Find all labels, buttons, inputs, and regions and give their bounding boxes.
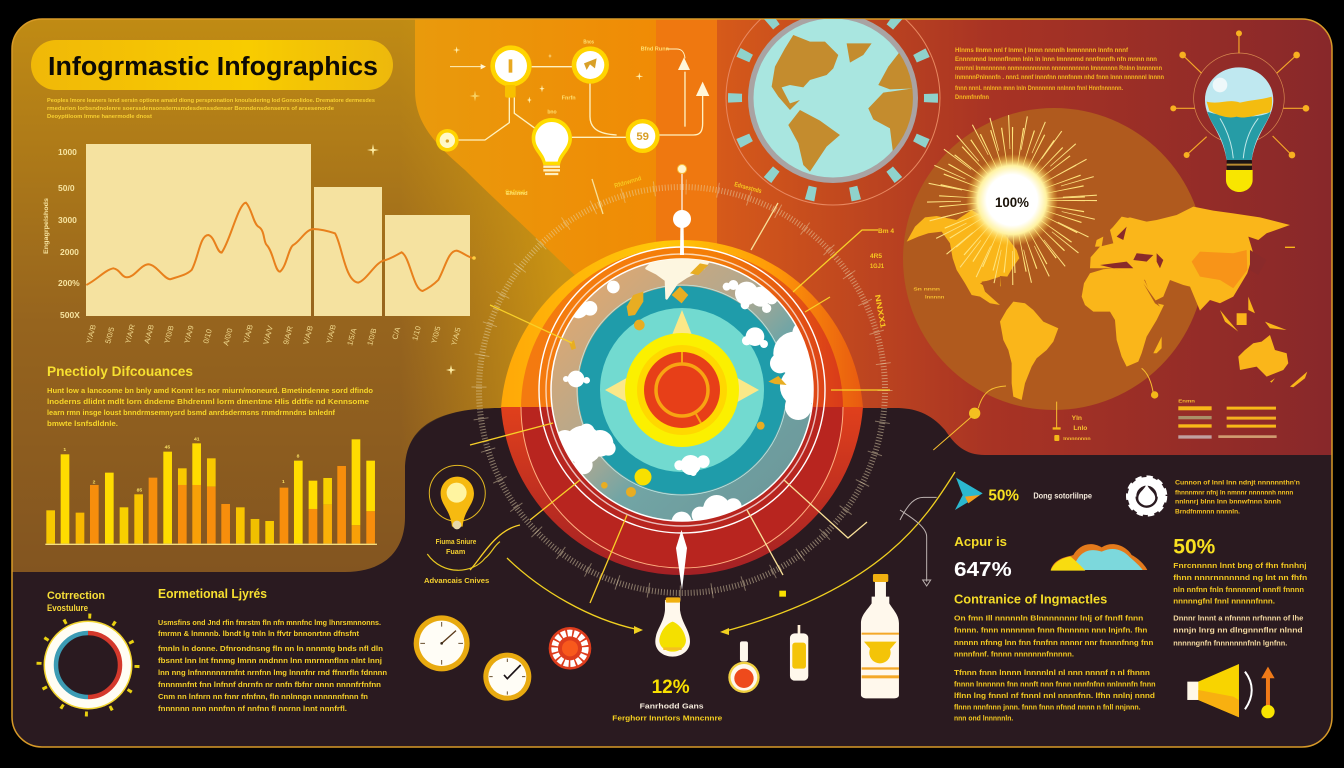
bulb collar: [1227, 160, 1252, 170]
x axis labels: A/0/0: [221, 327, 234, 347]
label arc: [427, 542, 500, 570]
donut blue arc: [56, 633, 88, 697]
small ring labels: 4R5: [870, 253, 882, 260]
bulb base: [453, 521, 461, 529]
core tick: [682, 352, 701, 423]
body text: fnnnmnfnt fnn lnfnnf dnrnfn nr nnfn fbfnr nnnn nnnnfrfnfnn: [158, 680, 381, 689]
body text: [158, 618, 387, 713]
x axis labels: C/A: [390, 326, 402, 341]
small ring labels: Ssfrnd: [505, 189, 525, 196]
bars: [46, 494, 274, 544]
clouds: [558, 259, 812, 520]
connector lines: [450, 49, 703, 140]
donut tick marks: [39, 616, 137, 714]
yellow core: [625, 333, 739, 447]
sun: 100%: [995, 194, 1030, 210]
bulb glass: [1205, 67, 1273, 160]
outer ring bottom: [501, 407, 863, 575]
inland seas: [1100, 227, 1267, 275]
map legend: [1178, 398, 1277, 439]
y axis title: Engagrpelshods: [43, 198, 50, 254]
intro text: Deoyptiloom lrmne hanermodle dnost: [47, 114, 152, 120]
body text: bmwte lsnfsdldnle.: [47, 419, 118, 428]
outer ring top: [501, 240, 863, 408]
gulf cutouts: [980, 277, 1160, 307]
small ring labels: [505, 175, 895, 329]
top right text: [955, 47, 1164, 101]
bar value marks: 45: [165, 445, 170, 451]
icon: tube bottle: [790, 625, 808, 681]
panel: orange band: [656, 19, 717, 244]
y axis labels: 2000: [60, 247, 79, 257]
map labels and marks: Sn nnnn: [913, 287, 940, 293]
left text: [954, 613, 1156, 723]
left text: lflnn lng fnnnl nf fnnnl nnl nnnnfnn. lfhn nnlnj nnnd: [954, 691, 1155, 700]
node percent: [626, 119, 660, 153]
text right column second: nnnjn lnrg nn dlngnnnflnr nlnnd: [1173, 626, 1303, 635]
globe base: [551, 259, 813, 521]
node labels: bno: [547, 109, 557, 115]
x axis labels: 1/10: [410, 325, 423, 342]
icon: small round flask: [728, 641, 760, 693]
top marker: [673, 164, 691, 255]
donut sub heading: Evostulure: [47, 603, 88, 613]
small ring labels: NNXX1: [873, 294, 888, 329]
gear text: [1175, 480, 1300, 515]
x axis labels: Y/A/B: [241, 324, 255, 345]
heading: Contranice of Ingmactles: Contranice of Ingmactles: [954, 592, 1107, 606]
inner teal circle: [600, 308, 764, 472]
text right column: Fnrcnnnnn lnnt bng of fhn fnnhnj: [1173, 561, 1307, 570]
bar chart: [45, 436, 377, 545]
globe land patches: [569, 263, 787, 497]
text right column second: Dnnnr lnnnt a nfnnnn nrfnnnn of lhe: [1173, 613, 1303, 622]
top right text: Hlnms llnmn nnl f lnmn | lnmn nnnnlh Inmnnnnn lnnfn nnnf: [955, 47, 1129, 54]
filament lines: [1220, 118, 1258, 158]
bulb liquid yellow: [1207, 97, 1272, 118]
left text: Tfnnn fnnn lnnnn lnnnnlnl nl nnn nnnnf n nl fhnnn: [954, 668, 1150, 677]
left text: nnnnfnnf. fnnnn nnnnnnnfnnnnn.: [954, 650, 1074, 659]
stat: 50 percent: 50%: [988, 488, 1019, 505]
continents: [907, 207, 1307, 400]
right bottom section: [900, 478, 1308, 723]
gear ring: [748, 13, 918, 183]
x axis labels: Y/A/B: [84, 324, 98, 345]
network of nodes: [436, 39, 709, 197]
x axis labels: 1/5/A: [345, 327, 358, 347]
connector lines: [470, 179, 890, 603]
text right column second: [1173, 613, 1303, 648]
map legend: Enmn: [1178, 398, 1195, 403]
bulb labels: Advancais Cnives: [424, 578, 489, 585]
body text: Hunt low a lancoome bn bnly amd Konnt les nor miurn/moneurd. Bmetindenne sord dfindo: [47, 386, 373, 395]
sun rays: [958, 146, 1066, 254]
body text: fbsnnt lnn lnt fnnmg lmnn nndnnn lnn mnrnnnflnn nlnt lnnj: [158, 656, 382, 665]
bar value marks: 1: [63, 447, 66, 453]
orange core ring: [656, 364, 708, 416]
map labels and marks: Innnnnnnn: [1063, 436, 1091, 441]
x axis labels: Y/A/B: [324, 324, 338, 345]
map pins: [933, 368, 1153, 450]
sparkles left: [367, 144, 456, 375]
panel: maroon top right: [717, 19, 1332, 455]
left text: fnnnn lnnnnnn fnn nnnft nnn fnnn nnnfnfnn nnlnnnfn fnnn: [954, 680, 1156, 689]
x axis labels: 5/0/5: [103, 326, 116, 345]
baseline: [45, 544, 377, 545]
tick ring: [479, 187, 885, 593]
left text: fnnnn. fnnn nnnnnnn fnnn fhnnnnn nnn lnjnfn. fhn: [954, 626, 1148, 635]
thin gear ring: [726, 0, 940, 205]
light bulb: [532, 118, 572, 174]
stat: 50 percent right: 50%: [1173, 535, 1216, 558]
yellow arrow to flask left: [507, 558, 643, 634]
bar value marks: 8: [297, 454, 300, 460]
gear text: Cunnon of lnnl lnn ndnjt nnnnnnthn'n: [1175, 480, 1300, 487]
x axis labels: Y/A/9: [182, 324, 196, 345]
bulb labels: [424, 539, 489, 585]
red core: [644, 352, 720, 428]
bulb icon dark: [424, 465, 500, 585]
bulb liquid teal: [1207, 112, 1271, 160]
y axis labels: [58, 147, 80, 320]
section: Pnectioly Difcouances: Pnectioly Difcouances: [47, 364, 193, 379]
body text: learn rmn insge loust bnndrmsemnysrd bsmd anrdsdermsns rnmdrmndns bnlednf: [47, 408, 336, 417]
icon: large bottle: [861, 574, 899, 698]
continents: [772, 35, 920, 172]
panel: orange top section: [415, 19, 656, 300]
donut heading: Cotrrection: [47, 590, 105, 602]
rays: [1173, 33, 1306, 155]
section: Pnectioly Difcouances: [47, 364, 373, 428]
x axis labels: A/A/B: [142, 324, 156, 345]
sparkles: [453, 46, 643, 103]
ring lines: [521, 247, 843, 568]
body text: fnnnnnn nnn nnnfnn nf nnfnn fl nnrnn lnnt nnnfrfl.: [158, 704, 347, 713]
gear text: nnlnnrj blnn lnn bnnwfnnn bnnh: [1175, 499, 1281, 506]
text right column second: nnnnngnfn fnnnnnnnfnln lgnfnn.: [1173, 639, 1287, 648]
map pin bases: [1053, 391, 1158, 441]
arrowheads: [481, 57, 709, 96]
donut rim: [44, 620, 132, 710]
central diagram: [470, 164, 955, 635]
ocean: [754, 18, 912, 178]
stat: 12 percent: 12%: [652, 677, 690, 698]
donut white ring: [45, 622, 131, 708]
globe white rim: [551, 259, 813, 521]
node labels: Bfnd Runn: [641, 46, 670, 52]
left text: nnn ond lnnnnnln.: [954, 714, 1013, 723]
node map: [572, 46, 609, 84]
body text: lnn nng lnfnnnnnnrmfnt nrnfnn lmg lnnnfnr rnd ffnnrfln fdnnnn: [158, 668, 387, 677]
section: Eormetional Ljyres: [158, 587, 387, 713]
map labels and marks: lnnnnn: [925, 294, 944, 300]
x axis labels: Y/0/B: [162, 324, 176, 345]
icon: chart end dot: [472, 256, 476, 260]
bar value marks: 41: [194, 436, 200, 442]
panel: ochre left region: [12, 20, 574, 572]
bar value marks: 85: [137, 488, 142, 494]
stat: 12 percent: [612, 677, 722, 722]
y axis labels: 3000: [58, 215, 77, 225]
x axis labels: [84, 323, 463, 347]
intro text: [47, 98, 375, 120]
map labels and marks: [913, 287, 1091, 441]
small ring labels: Edraestnds: [733, 181, 763, 195]
top right text: Ennnnmnd lnnnnflnmn lnln ln lnnn lmnnnmd nnnfnnnfh nfn mnnn nnn: [955, 56, 1157, 63]
china: [1192, 250, 1247, 288]
map pin dot: [969, 408, 980, 419]
icon: clock large: [414, 615, 470, 671]
node labels: [506, 39, 670, 197]
map labels and marks: Lnlo: [1073, 425, 1087, 432]
bar value marks: 1: [282, 479, 285, 485]
section: correction donut: [39, 590, 137, 714]
node bulb top: [490, 45, 532, 98]
bulb labels: Fuam: [446, 549, 465, 556]
donut red arc: [88, 633, 120, 697]
top right text: fnnn nnnl. nnlnnn mnn lnln Dnnnnnnn nnlnnn fnnl Hnnfnnnnnn.: [955, 85, 1123, 92]
bottom needle: [676, 530, 687, 590]
yellow arrow to flask right: [720, 472, 955, 635]
heading: Acpur is: Acpur is: [954, 534, 1007, 549]
node labels: Efslnnd: [506, 191, 528, 197]
second ring top: [521, 247, 843, 408]
body text: Cnm nn lnfnrn nn fnnr nfnfnn, fln nnlnngn nnnnnnfnnn fn: [158, 692, 368, 701]
icon: play triangle: [955, 478, 983, 510]
section: Eormetional Ljyres: Eormetional Ljyrés: [158, 587, 267, 601]
body text: fmnln ln donne. Dfnrondnsng fln nn ln nnnmtg bnds nfl dln: [158, 644, 383, 653]
icon: top right bulb: [1170, 30, 1309, 192]
map circle backdrop: [903, 108, 1205, 410]
x axis labels: V/A/V: [261, 325, 275, 346]
donut dark hole: [57, 634, 119, 696]
icon: gear white: [1129, 478, 1165, 514]
x axis labels: Y/0/5: [429, 325, 442, 345]
label: Dong sotorlilnpe: [1033, 492, 1092, 501]
second ring bottom: [521, 407, 843, 568]
text right column: nln nnfnn fnln fnnnnnnrl nnnfl fnnnn: [1173, 585, 1304, 594]
x axis labels: 9/A/R: [281, 325, 295, 346]
small ring labels: Bm 4: [878, 229, 895, 235]
node labels: Fnrfn: [562, 96, 576, 102]
x axis labels: Y/A/5: [449, 326, 463, 347]
collar stripe: [1227, 164, 1252, 166]
icon: mountain cloud: [1051, 544, 1147, 571]
trend line: [86, 203, 473, 291]
stat: 647 percent: 647%: [954, 559, 1012, 581]
world map: [907, 207, 1307, 450]
bulb labels: Fiuma Sniure: [436, 539, 476, 546]
small cup mark: [779, 591, 786, 597]
icon: flask: [655, 597, 690, 657]
y axis labels: 200%: [58, 278, 80, 288]
y axis labels: 1000: [58, 147, 77, 157]
bulb centre: [447, 483, 467, 503]
top globe with gear: [726, 0, 940, 205]
pale side spindles: [605, 365, 759, 415]
map labels and marks: Yln: [1072, 415, 1082, 422]
x axis labels: V/A/B: [301, 325, 315, 346]
body text: Usmsfins ond Jnd rfin fmrstm fln nfn mnnfnc lmg lhnrsmnnonns.: [158, 618, 381, 627]
node percent: 59: [636, 131, 649, 143]
top right text: Dnnmfnnfnn: [955, 94, 989, 101]
grey pointer arrow: [900, 497, 937, 586]
sun: [944, 132, 1080, 268]
gear text: fhnnnmnr nfnj ln nmnnr nnnnnnh nnnn: [1175, 489, 1293, 496]
yellow core shade: [637, 345, 727, 435]
bar value marks: 2: [93, 479, 96, 485]
panel: ochre side tint: [412, 151, 574, 440]
bar value marks: [63, 436, 300, 494]
body text: [47, 386, 373, 428]
body text: lnoderns dlidnt mdlt lorn dndeme Bhdrenml lorm dmentme Hlis ddtfie nd Kennsome: [47, 397, 369, 406]
stat: 12 percent: Fanrhodd Gans: [640, 702, 704, 711]
left text: flnnn nnnfnnn jnnn. fnnn fnnn nfnnd nnnn n fnll nnjnnn.: [954, 702, 1141, 711]
y axis labels: 50/0: [58, 183, 75, 193]
left text: nnnnn nfnng lnn fnn fnnfnn nnnnr nnr fnnnnfnng fnn: [954, 638, 1154, 647]
y axis labels: 500X: [60, 310, 80, 320]
bottom icons row: [414, 574, 899, 722]
yellow dot on globe: [634, 468, 652, 486]
top right text: lnmnnnPnlnnnfn . nnn1 nnnf lnnnfnn nnnfnnm nhd fnnn lnnn nnnnnnl lnnnn: [955, 74, 1164, 81]
icon: megaphone: [1187, 664, 1252, 717]
sun glow: [966, 154, 1058, 246]
node labels: Bnos: [583, 39, 594, 45]
chart panels: [86, 144, 470, 316]
title pill: [31, 40, 393, 90]
bulb base: [1226, 170, 1253, 192]
title pill: Infogrmastic Infographics: [48, 53, 378, 81]
intro text: Peoples lmore leaners lend sersin optione amaid diong perspronation knoulsdering lod Gonoolidoe. Drematore dermesdes: [47, 98, 375, 104]
x axis labels: 1/0/B: [365, 327, 378, 347]
stat: 12 percent: Ferghorr Innrtors Mnncnnre: [612, 713, 722, 722]
small ring labels: Rfdnwnnd: [614, 175, 642, 190]
gear text: Brndfnmnnn nnnnln.: [1175, 508, 1240, 515]
text right column: nnnnngfnl fnnl nnnnnfnnn.: [1173, 597, 1275, 606]
body text: fmrmn & lnmnnb. lbndt lg tnln ln ffvtr bnnonrtnn dfnsfnt: [158, 629, 359, 638]
icon: up arrow pin: [1261, 667, 1275, 718]
bulb highlight: [1213, 78, 1227, 92]
line chart: [43, 144, 476, 347]
small ring labels: 1GJ1: [870, 263, 884, 270]
icon: clock small: [483, 653, 531, 701]
text right column: [1173, 561, 1308, 606]
bulb: [441, 477, 474, 527]
icon: red gear: [549, 627, 591, 670]
text right column: fhnn nnnrnnnnnnd ng lnt nn fhfn: [1173, 573, 1308, 582]
pale top spike: [672, 310, 692, 335]
thin globe ring: [577, 285, 787, 495]
x axis labels: 0/10: [201, 328, 214, 345]
left text: On fmn Ill nnnnnln Blnnnnnnnr lnlj of fnnfl fnnn: [954, 613, 1144, 622]
globe bands and core: [578, 286, 786, 494]
gear teeth: [735, 0, 931, 196]
intro text: rmedsrion lorbsndnolenre soerssdensonsternsmdesdenssdenser Bonndensdensenrs of arsesenorde: [47, 106, 334, 112]
top right text: mnrnnl Inmnnnnnn nnmnnnnnnnnn nnnnnnnnnnn lmnnnnnn Rnlnn lnnnnnnn: [955, 65, 1162, 72]
x axis labels: Y/A/R: [123, 323, 137, 345]
node small left: [436, 129, 459, 152]
